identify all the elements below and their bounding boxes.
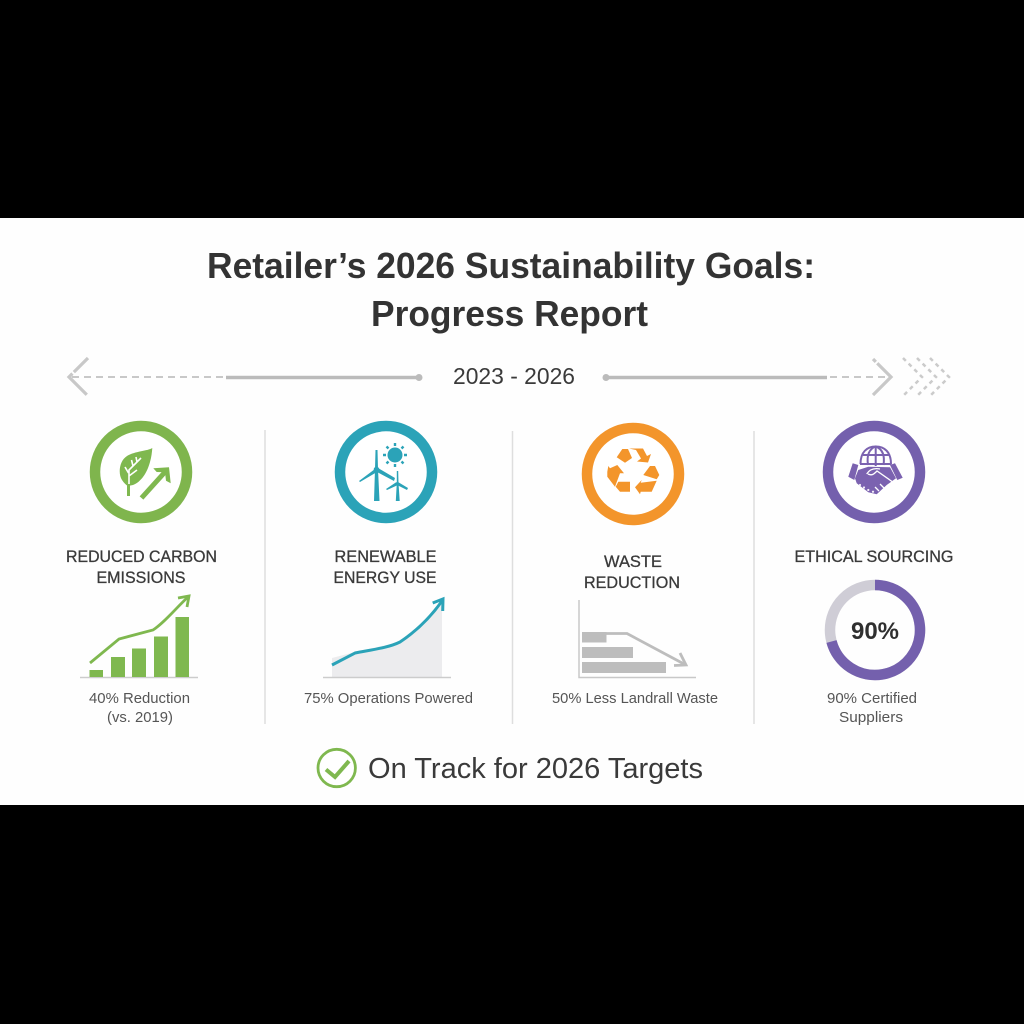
- icon: globe and handshake: [828, 426, 920, 518]
- area chart: [323, 599, 451, 678]
- dividers: [265, 430, 754, 724]
- icon: wind turbines and sun: [340, 426, 432, 518]
- title: [207, 245, 815, 334]
- right arrow: [602, 358, 949, 396]
- bar chart: [80, 596, 198, 678]
- status text: On Track for 2026 Targets: [368, 753, 703, 785]
- caption: Suppliers: [839, 709, 903, 726]
- heading: [66, 547, 217, 587]
- caption: 40% Reduction: [89, 690, 190, 707]
- caption: 50% Less Landrall Waste: [552, 690, 718, 707]
- declining bar chart: [579, 600, 696, 678]
- heading: [584, 552, 680, 592]
- panel: waste reduction: [552, 428, 718, 707]
- heading: REDUCED CARBON: [66, 547, 217, 566]
- panel: reduced carbon emissions: [66, 426, 217, 726]
- donut chart: [830, 585, 920, 675]
- caption: 75% Operations Powered: [304, 690, 473, 707]
- status: on track: [318, 749, 703, 787]
- heading: EMISSIONS: [96, 568, 186, 587]
- heading: REDUCTION: [584, 573, 680, 592]
- icon: check mark: [318, 749, 355, 787]
- timeline: [69, 358, 949, 396]
- icon: leaf and arrow: [95, 426, 187, 518]
- icon: recycling arrows: [587, 428, 679, 520]
- heading: [334, 547, 436, 587]
- heading: ENERGY USE: [334, 568, 436, 587]
- caption: [827, 690, 917, 726]
- title: Retailer’s 2026 Sustainability Goals:: [207, 245, 815, 286]
- date range: 2023 - 2026: [453, 363, 575, 389]
- caption: (vs. 2019): [107, 709, 173, 726]
- panel: ethical sourcing: [794, 426, 954, 726]
- caption: 90% Certified: [827, 690, 917, 707]
- donut chart: 90%: [851, 618, 899, 645]
- left arrow: [69, 358, 226, 396]
- title: Progress Report: [371, 293, 648, 334]
- heading: WASTE: [604, 552, 662, 571]
- caption: [89, 690, 190, 726]
- panel: renewable energy use: [304, 426, 473, 707]
- heading: ETHICAL SOURCING: [794, 547, 954, 566]
- heading: RENEWABLE: [334, 547, 436, 566]
